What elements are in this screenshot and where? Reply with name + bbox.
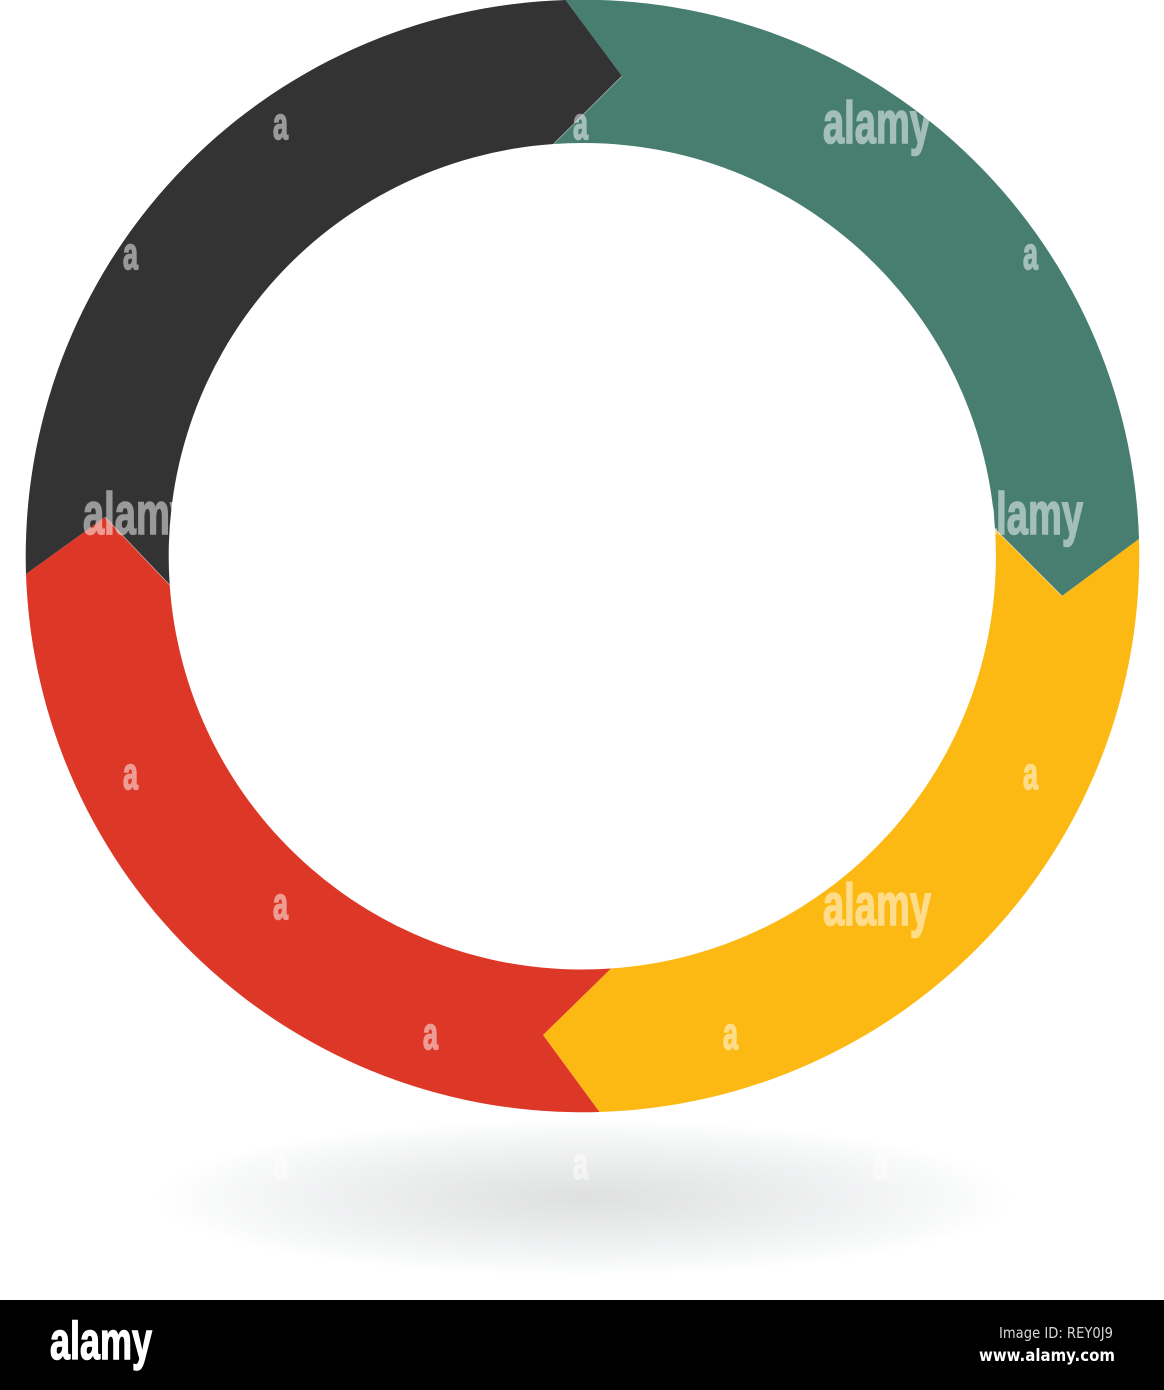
watermark: small letters: a [123, 748, 139, 799]
watermark: bottom right word: alamy [823, 872, 931, 938]
circular arrow ring [26, 0, 1139, 1112]
footer url: www.alamy.com [979, 1346, 1115, 1366]
watermark: small letters: a [873, 1138, 889, 1189]
ground shadow [154, 1120, 1014, 1276]
watermark: small letters: a [573, 1138, 589, 1189]
segment: red arrow [26, 517, 611, 1112]
watermark: small letters: a [1023, 228, 1039, 279]
watermark: small letters: a [723, 1008, 739, 1059]
watermark: left word: alamy [83, 481, 191, 547]
watermark: right word: alamy [975, 481, 1083, 547]
watermark: small letters: a [273, 98, 289, 149]
watermark: small letters: a [123, 228, 139, 279]
footer image id: Image ID: REY0J9 [999, 1324, 1113, 1342]
watermark overlay [83, 90, 1083, 1189]
watermark: small letters [123, 98, 1039, 1189]
footer logo: alamy [50, 1312, 152, 1371]
watermark: small letters: a [273, 878, 289, 929]
footer bar [0, 1300, 1164, 1390]
segment: yellow arrow [543, 529, 1139, 1112]
watermark: small letters: a [1023, 748, 1039, 799]
watermark: small letters: a [273, 1138, 289, 1189]
segment: dark arrow [26, 0, 622, 585]
watermark: top right word: alamy [823, 90, 931, 156]
watermark: small letters: a [423, 1008, 439, 1059]
segment: teal arrow [554, 0, 1139, 596]
watermark: small letters: a [573, 98, 589, 149]
